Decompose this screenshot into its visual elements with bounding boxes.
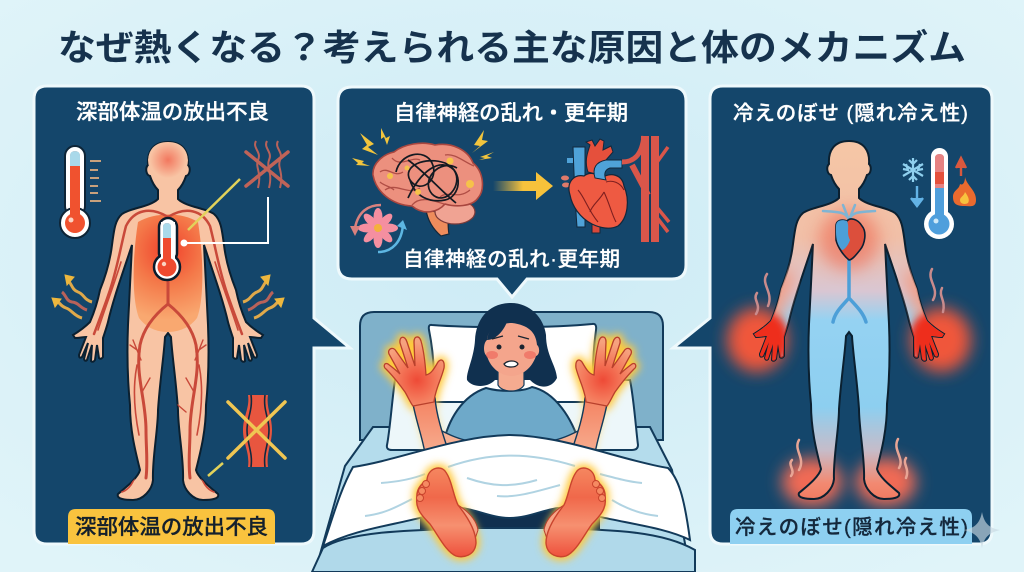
icon: lightning bolts xyxy=(352,128,494,166)
connector: white xyxy=(180,197,268,246)
icon: flame xyxy=(953,177,976,206)
icon: constricted vessel xyxy=(208,395,285,476)
icon: snowflake xyxy=(903,158,923,182)
mattress xyxy=(315,427,690,572)
icon: thermometer xyxy=(60,146,101,238)
panel: hidden cold type xyxy=(673,86,992,544)
label: core body heat xyxy=(68,509,275,544)
icon: blocked heat X xyxy=(246,141,288,188)
panel: autonomic nerves and menopause xyxy=(338,87,686,297)
arrows: heat right xyxy=(243,275,284,318)
icon: arteries xyxy=(622,136,669,242)
heading: autonomic: 自律神経の乱れ・更年期 xyxy=(394,102,628,125)
steam: hands xyxy=(756,269,944,314)
icon: up arrow xyxy=(956,158,966,176)
blanket folds xyxy=(365,456,658,516)
blanket xyxy=(323,435,690,546)
illustration: woman in bed xyxy=(312,303,695,572)
illustration: body with vessels xyxy=(73,140,263,500)
upper pillow xyxy=(429,324,596,402)
heading: hidden cold: 冷えのぼせ (隠れ冷え性) xyxy=(733,102,968,125)
steam: feet xyxy=(790,439,907,478)
label: hidden cold xyxy=(730,509,972,544)
left arm and hand xyxy=(384,337,465,460)
label: hidden cold: 冷えのぼせ(隠れ冷え性) xyxy=(735,516,968,539)
label: core body heat: 深部体温の放出不良 xyxy=(75,516,268,539)
icon: flower with cycle arrows xyxy=(350,205,407,252)
neck xyxy=(498,370,524,391)
icon: brain xyxy=(373,143,482,236)
glow: hands and feet xyxy=(727,308,971,506)
glow: hands xyxy=(384,337,636,460)
thermometer: center xyxy=(154,218,180,280)
illustration: cold body with hot extremities xyxy=(752,140,946,500)
pointer line: yellow xyxy=(188,179,240,230)
icon: heart xyxy=(561,139,627,233)
headboard xyxy=(360,312,663,440)
lower pillow xyxy=(387,380,638,450)
icon: thermometer mixed xyxy=(924,148,954,239)
heading: core body heat: 深部体温の放出不良 xyxy=(76,101,269,124)
icon: down arrow xyxy=(911,186,923,206)
glow: feet xyxy=(417,468,605,557)
left foot xyxy=(416,468,478,557)
gap under blanket xyxy=(420,495,600,530)
lower sheet xyxy=(312,528,695,572)
arrow: brain to heart xyxy=(493,172,553,200)
icon: sparkle mark xyxy=(964,512,1000,548)
arrows: heat left xyxy=(52,275,92,318)
face xyxy=(484,322,539,376)
right foot xyxy=(544,468,606,557)
panel: core body heat release xyxy=(34,86,350,544)
vessels: blue xyxy=(823,205,875,322)
subheading: autonomic: 自律神経の乱れ·更年期 xyxy=(403,248,620,271)
right arm and hand xyxy=(555,337,636,460)
shirt xyxy=(443,387,580,445)
icon: heart xyxy=(836,219,865,260)
title: なぜ熱くなる？考えられる主な原因と体のメカニズム xyxy=(58,27,966,68)
hair xyxy=(467,303,557,387)
